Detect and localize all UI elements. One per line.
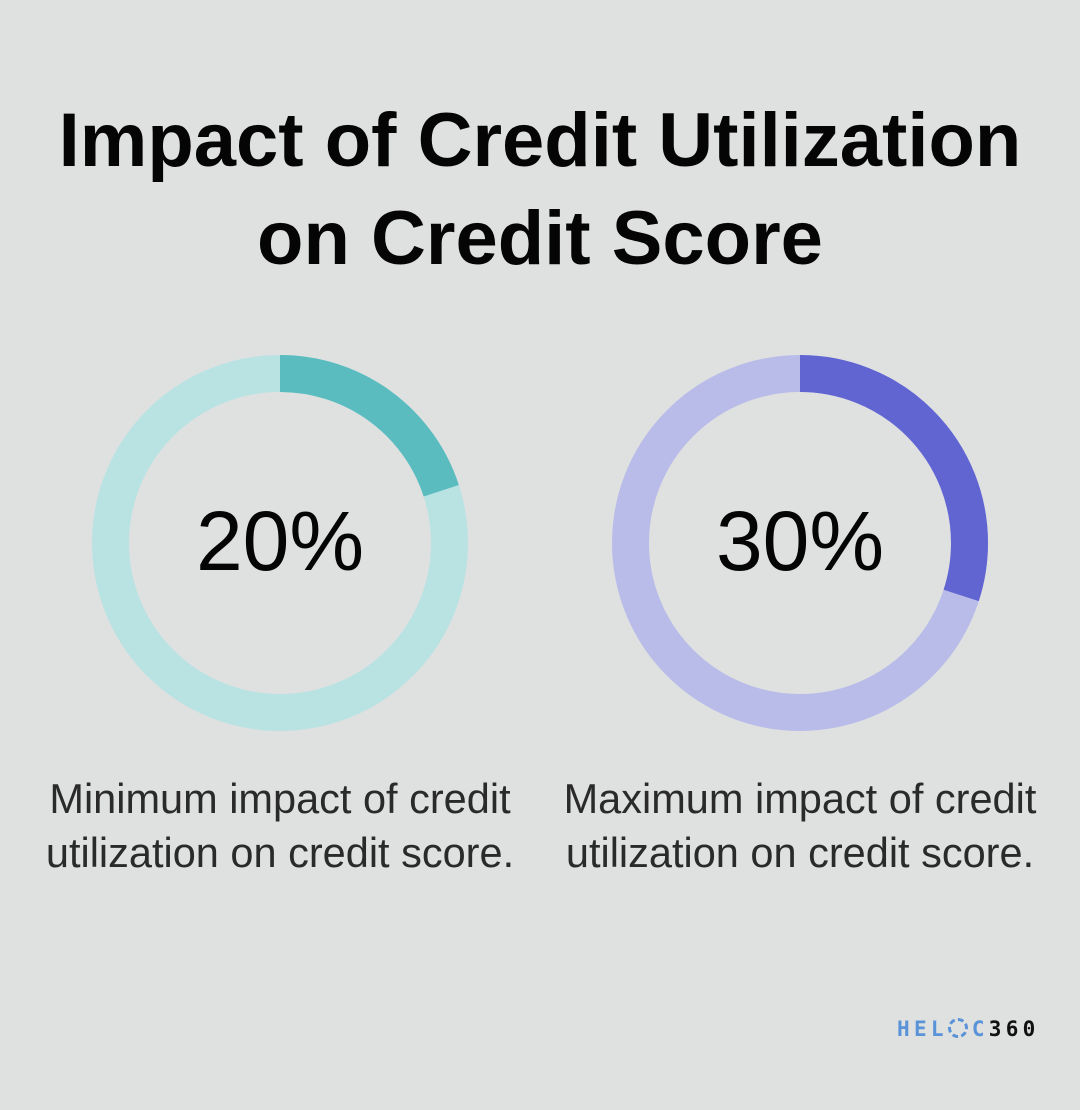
title: [59, 98, 1021, 281]
donut: 20%: 20%: [196, 494, 364, 588]
caption: minimum: Minimum impact of credit utilization on credit score.: [46, 775, 514, 876]
donut: 30%: [630, 374, 970, 712]
donut: 30%: 30%: [716, 494, 884, 588]
title: on Credit Score: [257, 196, 823, 281]
donut: 20%: [110, 374, 450, 712]
title: Impact of Credit Utilization: [59, 98, 1021, 183]
logo: HEL C360: [897, 1017, 1040, 1041]
caption: maximum: Maximum impact of credit utilization on credit score.: [564, 775, 1036, 876]
